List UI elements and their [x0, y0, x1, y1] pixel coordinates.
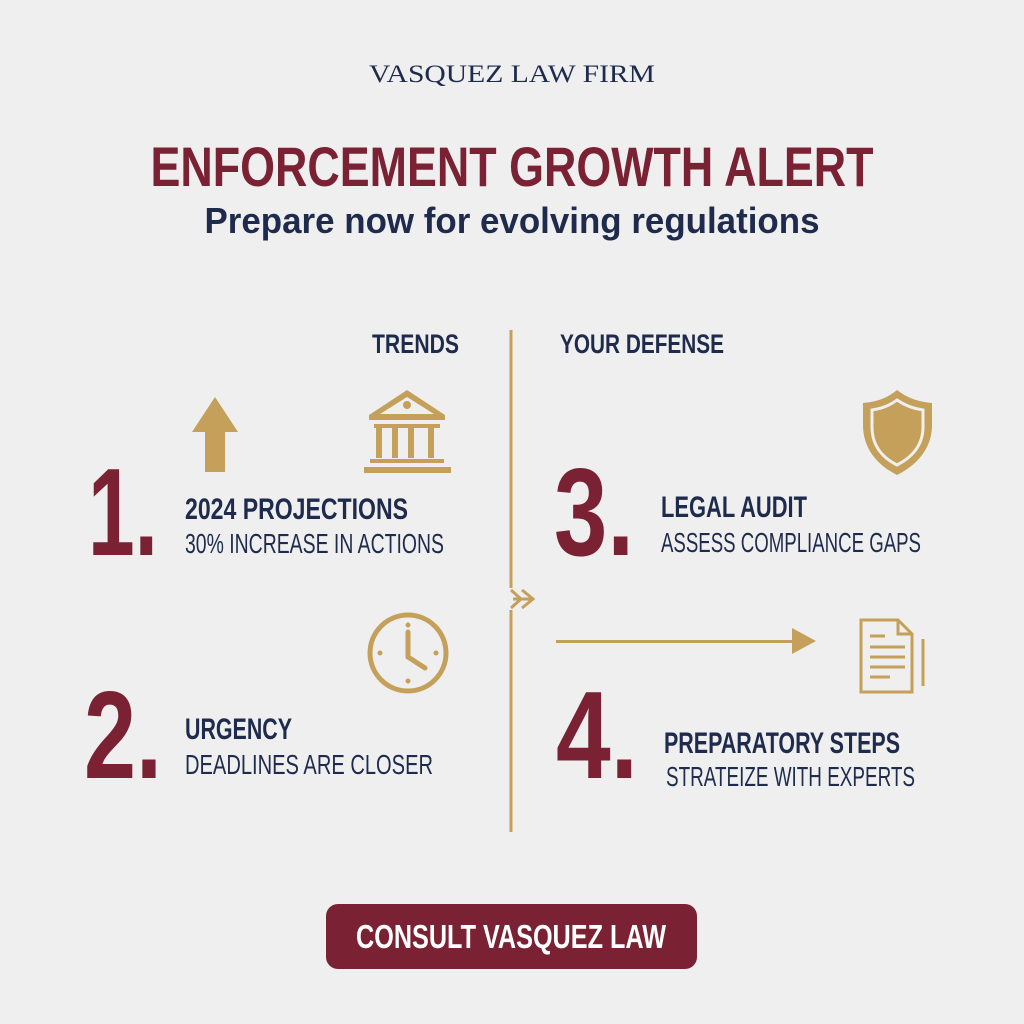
button: consult: CONSULT VASQUEZ LAW [356, 918, 667, 955]
item 1: 30% INCREASE IN ACTIONS [185, 528, 444, 559]
item 2: 2. [84, 667, 162, 805]
icon: up arrow [192, 397, 238, 472]
item 4: PREPARATORY STEPS [664, 727, 900, 760]
divider line with chevron [511, 330, 533, 832]
item 3: 3. [554, 444, 634, 582]
icon: document [861, 620, 923, 692]
item 4 [556, 667, 915, 805]
firm name: VASQUEZ LAW FIRM [369, 61, 655, 88]
icon: shield [863, 390, 932, 475]
item 2 [84, 667, 433, 805]
item 1: 1. [88, 444, 158, 582]
item 1 [88, 444, 444, 582]
subtitle: Prepare now for evolving regulations [204, 200, 820, 241]
item 2: URGENCY [185, 713, 292, 746]
item 1: 2024 PROJECTIONS [185, 493, 408, 526]
heading: trends: TRENDS [372, 329, 459, 359]
icon: clock [370, 615, 446, 691]
button: consult [326, 904, 697, 969]
item 3: LEGAL AUDIT [661, 491, 807, 524]
item 2: DEADLINES ARE CLOSER [185, 749, 433, 780]
heading: your defense: YOUR DEFENSE [560, 329, 724, 359]
icon: courthouse [364, 390, 451, 473]
arrow: horizontal [556, 628, 816, 654]
item 4: 4. [556, 667, 638, 805]
item 3 [554, 444, 921, 582]
